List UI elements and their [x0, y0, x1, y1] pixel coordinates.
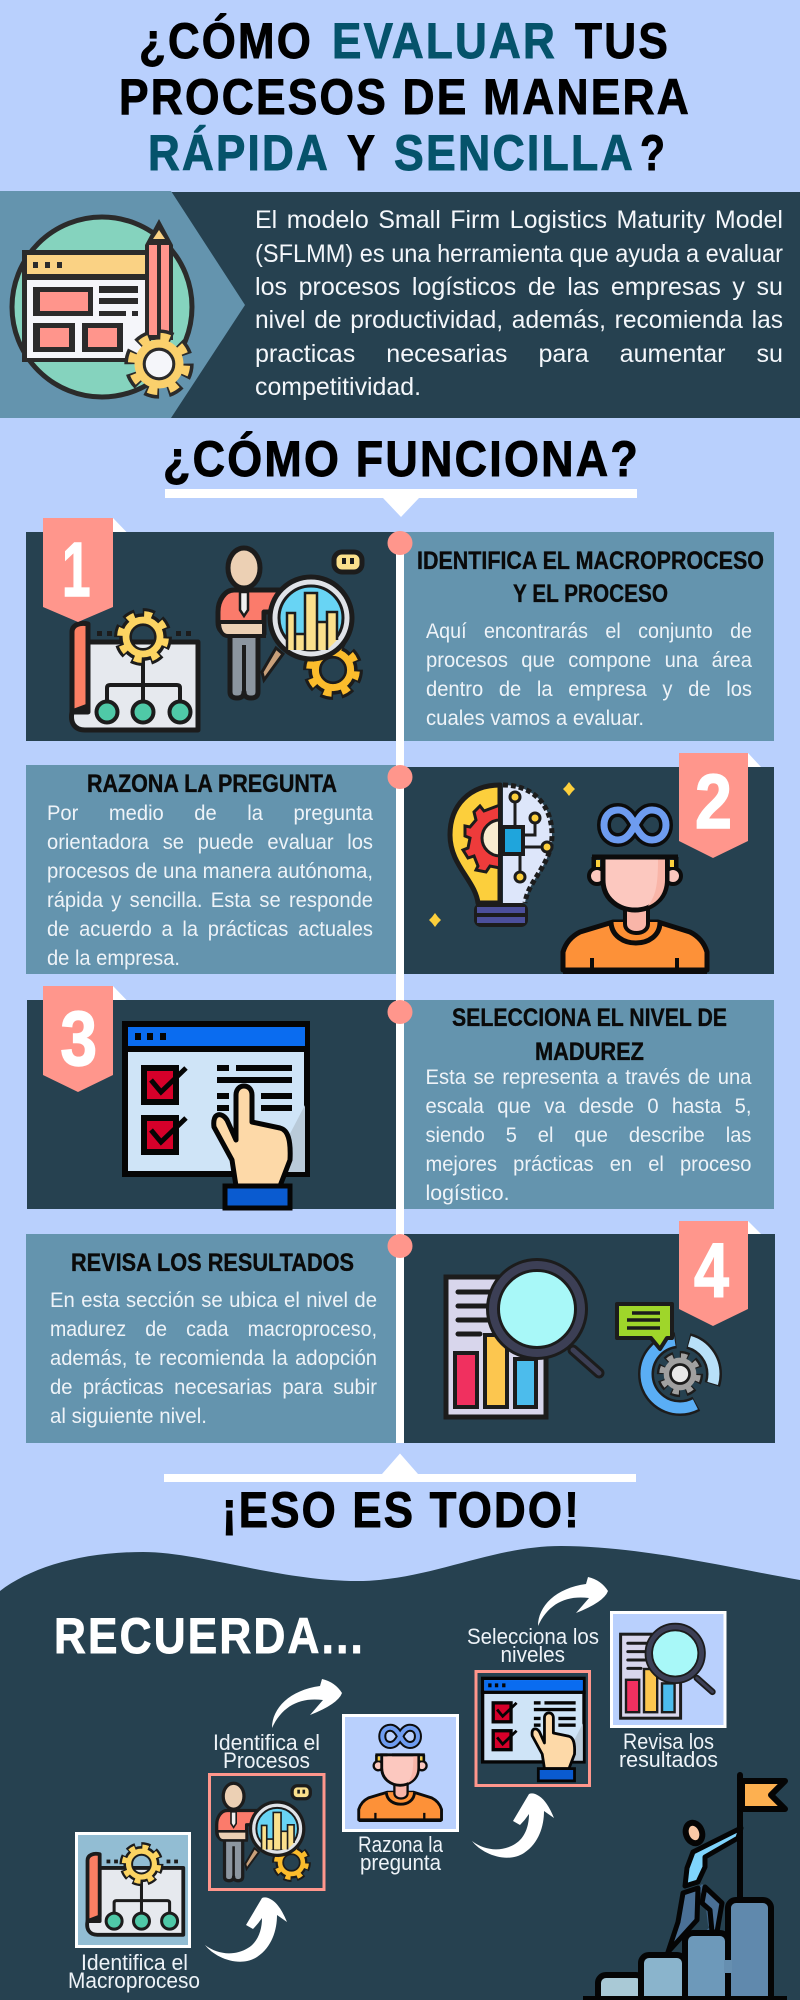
- heading: eso es todo: ¡ESO ES TODO!: [222, 1482, 581, 1538]
- heading: step 3: SELECCIONA EL NIVEL DE: [452, 1004, 727, 1032]
- text: step 2 body: de la empresa.: [47, 947, 180, 970]
- title: Y: [347, 125, 375, 181]
- text: step 3 body: logístico.: [426, 1182, 510, 1205]
- text: step 1 body: dentro de la empresa y de los: [426, 678, 752, 701]
- label: procesos: [213, 1730, 320, 1773]
- text: step 4 body: de prácticas necesarias para subir: [50, 1376, 377, 1399]
- heading: step 1: Y EL PROCESO: [513, 580, 668, 608]
- panel: step 3: [27, 1000, 774, 1209]
- text: intro paragraph: competitividad.: [255, 373, 421, 401]
- pointer bar: bottom: [164, 1454, 636, 1482]
- text: step 3 body: [426, 1066, 752, 1205]
- card: resultados: [612, 1612, 725, 1726]
- ribbon: number 1: [43, 518, 126, 622]
- label: macroproceso: Macroproceso: [68, 1968, 200, 1993]
- text: step 3 body: Esta se representa a través de una: [426, 1066, 752, 1089]
- card: macroproceso: [76, 1834, 190, 1946]
- arrow: macroproceso to procesos: [205, 1897, 287, 1962]
- text: step 4 body: al siguiente nivel.: [50, 1405, 207, 1428]
- text: step 2 body: orientadora se puede evaluar los: [47, 831, 373, 854]
- icon: speech bubble and cycle gear: [617, 1304, 714, 1408]
- label: niveles: [467, 1624, 599, 1667]
- text: step 1 body: procesos que compone una área: [426, 649, 752, 672]
- text: intro paragraph: (SFLMM) es una herramienta que ayuda a evaluar: [255, 240, 783, 268]
- icon: climber with flag on stairs: [583, 1775, 787, 2000]
- card: procesos: [210, 1774, 324, 1890]
- label: resultados: Revisa los: [623, 1729, 714, 1754]
- title: RÁPIDA: [148, 125, 330, 181]
- arrow: procesos to pregunta: [272, 1679, 342, 1728]
- heading: step 4: REVISA LOS RESULTADOS: [71, 1249, 354, 1277]
- icon: light bulb with circuit: [429, 782, 575, 927]
- text: step 3 body: escala que va desde 0 hasta 5,: [426, 1095, 752, 1118]
- title: ?: [640, 125, 665, 181]
- panel: step 2: [26, 765, 774, 974]
- text: step 3 body: siendo 5 el que describe las: [426, 1124, 752, 1147]
- title: EVALUAR: [332, 13, 557, 69]
- text: step 2 body: [47, 802, 373, 970]
- label: macroproceso: [68, 1950, 200, 1993]
- label: procesos: Procesos: [223, 1748, 310, 1773]
- ribbon: number 4: [679, 1221, 761, 1326]
- text: step 2 body: de acuerdo a la prácticas actuales: [47, 918, 373, 941]
- heading: como funciona: ¿CÓMO FUNCIONA?: [163, 431, 640, 487]
- title: [119, 13, 691, 181]
- arrow: niveles to resultados: [538, 1577, 608, 1626]
- label: procesos: Identifica el: [213, 1730, 320, 1755]
- pointer bar: top: [165, 489, 637, 517]
- icon: macroprocess diagram: [72, 614, 198, 730]
- label: resultados: resultados: [619, 1747, 718, 1772]
- timeline: vertical line with dots: [388, 531, 412, 1443]
- card: pregunta: [344, 1716, 458, 1830]
- heading: step 2: RAZONA LA PREGUNTA: [87, 770, 337, 798]
- text: step 4 body: En esta sección se ubica el nivel de: [50, 1289, 377, 1312]
- text: step 4 body: [50, 1289, 377, 1428]
- text: step 1 body: cuales vamos a evaluar.: [426, 707, 644, 730]
- text: step 1 body: Aquí encontrarás el conjunto de: [426, 620, 752, 643]
- text: step 2 body: Por medio de la pregunta: [47, 802, 373, 825]
- arrow: pregunta to niveles: [472, 1793, 554, 1858]
- ribbon: number 4: 4: [694, 1228, 729, 1314]
- icon: process window with pencil and gear: [12, 217, 192, 397]
- heading: step 3: MADUREZ: [535, 1038, 644, 1066]
- ribbon: number 2: 2: [695, 759, 732, 845]
- title: PROCESOS DE MANERA: [119, 69, 691, 125]
- text: intro paragraph: El modelo Small Firm Logistics Maturity Model: [255, 206, 783, 234]
- ribbon: number 3: [43, 986, 126, 1092]
- label: pregunta: [358, 1832, 444, 1875]
- text: intro paragraph: practicas necesarias para aumentar su: [255, 340, 783, 368]
- panel: step 4: [26, 1234, 775, 1443]
- icon: person with magnifier: [218, 548, 362, 698]
- icon: checklist window with hand: [122, 1024, 310, 1208]
- card: niveles: [476, 1672, 590, 1786]
- icon: person with infinity thought: [563, 810, 707, 972]
- text: step 4 body: madurez de cada macroproceso,: [50, 1318, 377, 1341]
- ribbon: number 2: [679, 753, 761, 858]
- ribbon: number 3: 3: [60, 996, 97, 1082]
- label: resultados: [619, 1729, 718, 1772]
- label: pregunta: Razona la: [358, 1832, 444, 1857]
- icon: report with magnifier: [446, 1265, 599, 1417]
- title: SENCILLA: [394, 125, 635, 181]
- text: step 3 body: mejores prácticas en el proceso: [426, 1153, 752, 1176]
- panel: step 1: [26, 532, 774, 741]
- text: intro paragraph: [255, 206, 783, 401]
- label: pregunta: pregunta: [360, 1850, 442, 1875]
- text: intro paragraph: nivel de productividad, además, recomienda las: [255, 306, 783, 334]
- text: step 4 body: además, te recomienda la adopción: [50, 1347, 377, 1370]
- text: intro paragraph: los procesos logísticos de las empresas y su: [255, 273, 783, 301]
- title: ¿CÓMO: [139, 13, 313, 69]
- heading: step 3: [452, 1004, 727, 1066]
- panel: intro banner: [0, 191, 800, 418]
- panel: recuerda: [0, 1546, 800, 2000]
- text: step 2 body: procesos de una manera autónoma,: [47, 860, 373, 883]
- title: TUS: [575, 13, 670, 69]
- label: niveles: niveles: [500, 1642, 565, 1667]
- text: step 1 body: [426, 620, 752, 730]
- ribbon: number 1: 1: [62, 527, 90, 613]
- label: macroproceso: Identifica el: [81, 1950, 188, 1975]
- heading: recuerda: RECUERDA...: [54, 1608, 365, 1664]
- label: niveles: Selecciona los: [467, 1624, 599, 1649]
- heading: step 1: [417, 547, 764, 608]
- text: step 2 body: rápida y sencilla. Esta se responde: [47, 889, 373, 912]
